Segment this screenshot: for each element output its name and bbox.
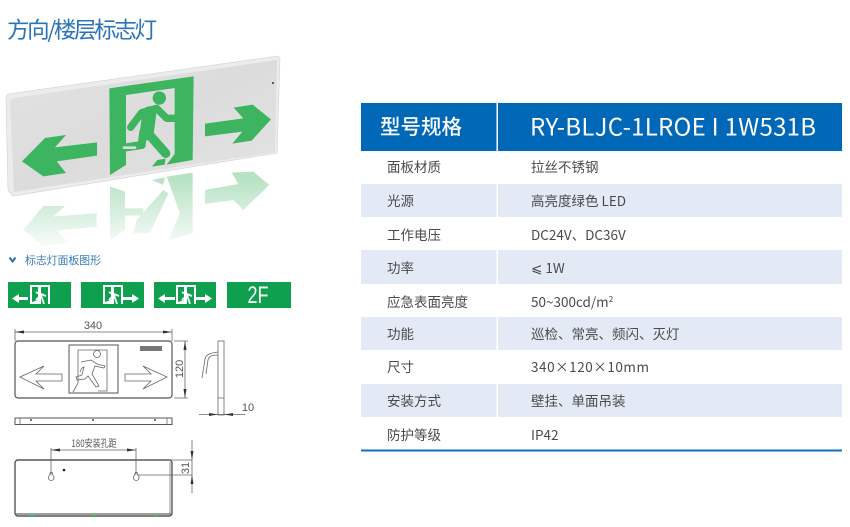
product photo: exit sign — [0, 56, 285, 250]
table header: RY-BLJC-1LROE I 1W531B — [530, 108, 816, 142]
row: protection grade: IP42 — [531, 424, 558, 444]
side view technical drawing: 10 — [242, 402, 254, 414]
row: installation: 安装方式 — [387, 390, 441, 410]
logo — [140, 346, 162, 351]
table header: 型号规格 — [380, 110, 462, 140]
row: voltage: 工作电压 — [387, 224, 441, 244]
sign face — [10, 60, 277, 192]
row: voltage: DC24V、DC36V — [531, 224, 626, 244]
back view technical drawing: 180安装孔距 — [71, 436, 117, 450]
panel: left arrow — [8, 282, 71, 308]
outline arrows — [20, 366, 62, 389]
row: installation: 壁挂、单面吊装 — [531, 390, 626, 410]
height dimension — [174, 341, 188, 398]
row: panel material: 拉丝不锈钢 — [531, 156, 598, 176]
row: protection grade — [387, 424, 558, 444]
row: voltage — [387, 224, 626, 244]
back view technical drawing: 31 — [180, 462, 192, 474]
width dimension: 340 — [84, 320, 102, 332]
row: surface brightness: 50~300cd/m — [531, 291, 609, 311]
sign plate — [6, 56, 280, 196]
row: function — [361, 317, 842, 350]
row: light source — [361, 184, 842, 217]
back view technical drawing — [15, 436, 194, 517]
title: 方向/楼层标志灯 — [7, 13, 157, 45]
row: surface brightness — [387, 291, 614, 311]
row: function: 功能 — [387, 323, 414, 343]
row: installation — [361, 384, 842, 417]
panel: right arrow — [81, 282, 144, 308]
door frame — [109, 76, 194, 175]
front view technical drawing — [15, 320, 188, 398]
panel graphics heading: 标志灯面板图形 — [25, 252, 101, 268]
table header — [361, 103, 842, 151]
panel: floor 2F: 2F — [247, 283, 269, 309]
row: panel material — [387, 156, 598, 176]
mounting dot — [272, 82, 274, 84]
row: panel material: 面板材质 — [387, 156, 441, 176]
left arrow — [22, 135, 97, 176]
row: power: ⩽ 1W — [531, 257, 565, 277]
panel: both arrows — [154, 282, 216, 308]
row: protection grade: 防护等级 — [387, 424, 441, 444]
row: light source: 光源 — [387, 190, 414, 210]
height dimension: 120 — [174, 360, 186, 378]
table bottom rule — [361, 450, 842, 452]
running figure — [124, 91, 175, 167]
specification table — [361, 103, 842, 452]
panel icons row — [8, 282, 291, 309]
row: function: 巡检、常亮、频闪、灭灯 — [531, 323, 680, 343]
chevron icon — [10, 258, 16, 262]
row: light source: 高亮度绿色 LED — [531, 190, 626, 210]
sign reflection — [0, 172, 285, 250]
row: surface brightness: 应急表面亮度 — [387, 291, 468, 311]
outline — [15, 341, 172, 398]
right arrow — [205, 105, 271, 144]
row: power: 功率 — [387, 257, 414, 277]
green pictogram — [22, 76, 271, 176]
row: surface brightness: 2 — [609, 294, 614, 305]
top view technical drawing — [15, 418, 172, 424]
side view technical drawing — [199, 341, 254, 416]
row: size: 340×120×10mm — [531, 356, 649, 376]
width dimension — [15, 320, 172, 341]
door pictogram outline — [69, 345, 118, 393]
row: power — [361, 250, 842, 284]
panel: floor 2F — [227, 282, 291, 309]
row: size: 尺寸 — [387, 356, 414, 376]
row: size — [361, 350, 842, 384]
